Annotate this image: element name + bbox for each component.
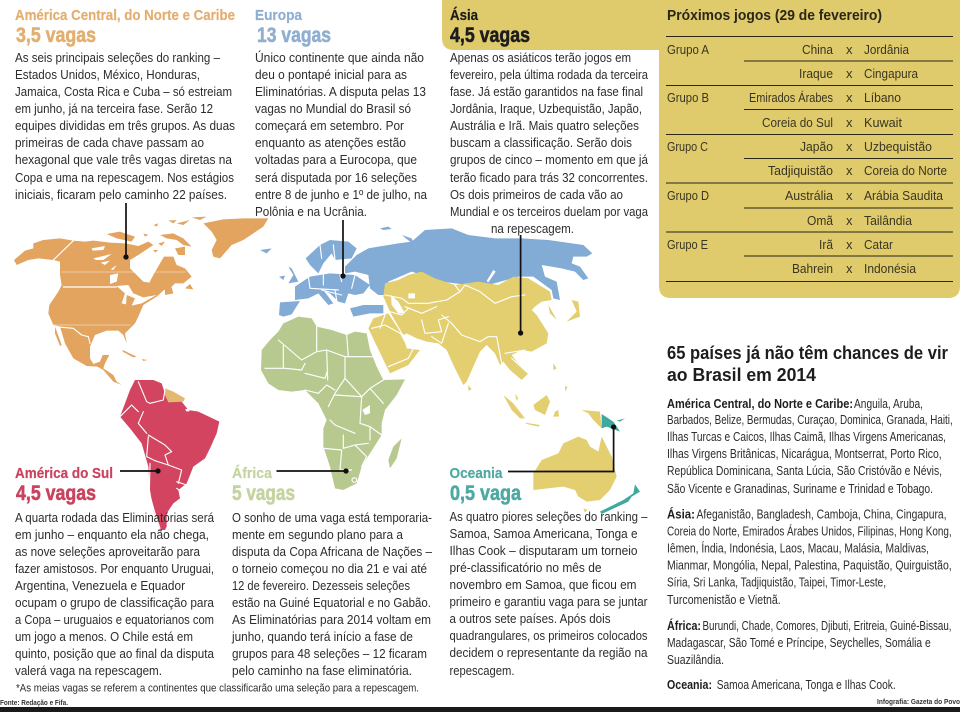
text: África: disputa da Copa Africana de Nações – [232, 544, 433, 559]
table: groups and matches: Tadjiquistão [768, 163, 833, 178]
heading: Europa [255, 7, 331, 47]
heading: próximos jogos: Próximos jogos (29 de fevereiro) [667, 8, 882, 24]
text: África: mente em segundo plano para a [232, 527, 404, 542]
list: Ásia eliminated [667, 506, 952, 607]
table: groups and matches: x [846, 139, 853, 154]
text: Oceania [450, 509, 648, 678]
list: Ásia eliminated: Síria, Sri Lanka, Tadjiquistão, Taipei, Timor-Leste, [667, 576, 886, 590]
text: África [231, 510, 433, 678]
text: América do Sul: em junho – enquanto ela não chega, [15, 527, 209, 542]
panel: Oceania [450, 465, 648, 678]
text: América do Sul: Argentina, Venezuela e Equador [15, 578, 186, 593]
text: Oceania: repescagem. [450, 663, 514, 678]
leader lines [120, 203, 615, 473]
text: Ásia: Austrália e Irã. Mais quatro seleções [450, 118, 639, 133]
bottom black bar [0, 707, 960, 712]
text: Europa: Polônia e na Ucrânia. [255, 204, 367, 219]
panel: próximos jogos table [666, 8, 953, 282]
text: Ásia: Os dois primeiros de cada vão ao [450, 187, 623, 202]
list: Ásia eliminated: Ásia: [667, 506, 695, 522]
text: Europa: entre 8 de junho e 1º de julho, na [255, 187, 428, 202]
text: América Central: Estados Unidos, México, Honduras, [15, 67, 200, 82]
text: África: As Eliminatórias para 2014 voltam em [232, 612, 431, 627]
text: América do Sul: A quarta rodada das Eliminatórias será [15, 510, 215, 525]
text: Oceania: Ilhas Cook – disputaram um torneio [450, 543, 638, 558]
table: groups and matches: x [846, 90, 853, 105]
panel: Ásia [450, 7, 649, 236]
table: groups and matches: Coreia do Norte [864, 163, 947, 178]
text: Europa: deu o pontapé inicial para as [255, 67, 407, 82]
text: África: 12 de fevereiro. Dezesseis seleções [232, 578, 410, 593]
table: groups and matches: Japão [800, 139, 833, 154]
text: América Central: primeiras de cada chave passam ao [15, 135, 204, 150]
panel: Europa [255, 7, 428, 219]
table: groups and matches: Bahrein [792, 261, 833, 276]
list: América Central eliminated [667, 397, 953, 496]
list: América Central eliminated: América Central, do Norte e Caribe: [667, 397, 853, 411]
text: Oceania: pré-classificatório no mês de [450, 560, 602, 575]
heading: Ásia [450, 7, 530, 47]
map: Africa [261, 317, 405, 490]
text: América Central: iniciais, ficaram pelo caminho 22 países. [15, 187, 227, 202]
heading: Oceania: 0,5 vaga [450, 482, 521, 505]
heading: África: África [232, 465, 273, 482]
text: Oceania: Samoa, Samoa Americana, Tonga e [450, 526, 638, 541]
text: América Central: Copa e uma na repescagem. Nos estágios [15, 170, 234, 185]
panel: yellow next games background [442, 0, 960, 298]
text: América Central: Jamaica, Costa Rica e Cuba – só estreiam [15, 84, 232, 99]
text: África: pelo caminho na fase eliminatória. [232, 663, 412, 678]
heading: América Central: 3,5 vagas [16, 24, 96, 47]
table: groups and matches: Jordânia [864, 42, 910, 57]
table: groups and matches: x [846, 42, 853, 57]
heading: 65 países [667, 343, 948, 385]
text: América do Sul [15, 510, 215, 678]
footnote: *As meias vagas se referem a continentes que classificarão uma seleção para a repescagem. [16, 682, 419, 694]
text: Ásia: Apenas os asiáticos terão jogos em [450, 50, 631, 65]
text: Oceania: a outros sete países. Após dois [450, 611, 611, 626]
heading: África: 5 vagas [232, 482, 295, 505]
list: África eliminated [667, 618, 952, 667]
text: Europa: Eliminatórias. A disputa pelas 13 [255, 84, 426, 99]
heading: Ásia: 4,5 vagas [450, 24, 530, 47]
list: Oceania eliminated: Samoa Americana, Tonga e Ilhas Cook. [717, 678, 896, 692]
panel: América Central, do Norte e Caribe [15, 7, 235, 202]
text: América do Sul: valerá vaga na repescagem. [15, 663, 162, 678]
heading: 65 países: ao Brasil em 2014 [667, 365, 816, 385]
text: América do Sul: as nove seleções aproveitarão para [15, 544, 201, 559]
map: North America [14, 217, 268, 385]
table: groups and matches: x [846, 188, 853, 203]
table: groups and matches: x [846, 213, 853, 228]
text: Europa: Único continente que ainda não [255, 50, 424, 65]
heading: África [232, 465, 295, 505]
table: groups and matches: Uzbequistão [864, 139, 932, 154]
text: Ásia: terão ficado para trás 32 concorrentes. [450, 170, 648, 185]
text: África: o torneio começou no dia 21 e vai até [232, 561, 427, 576]
text: Oceania: As quatro piores seleções do ranking – [450, 509, 648, 524]
text: América do Sul: fazer amistosos. Por enquanto Uruguai, [15, 561, 214, 576]
table: groups and matches: x [846, 115, 853, 130]
table: groups and matches: Tailândia [864, 213, 913, 228]
table: groups and matches: Grupo E [667, 237, 708, 252]
text: Ásia: buscam a classificação. Serão dois [450, 135, 632, 150]
panel: América do Sul [15, 465, 215, 678]
text: Oceania: quadrangulares, os primeiros colocados [450, 628, 648, 643]
map: Europe and Russia [260, 227, 592, 317]
table: groups and matches [667, 42, 947, 276]
text: América do Sul: ocupam o grupo de classificação para [15, 595, 215, 610]
heading: América do Sul [15, 465, 113, 505]
table: groups and matches: Emirados Árabes [749, 90, 833, 105]
text: Ásia: fase. Já estão garantidos na fase final [450, 84, 643, 99]
text: América Central: equipes divididas em três grupos. As duas [15, 118, 235, 133]
table: groups and matches: Iraque [799, 66, 833, 81]
table: groups and matches: Cingapura [864, 66, 919, 81]
table: groups and matches: Kuwait [864, 115, 902, 130]
table: groups and matches: Austrália [785, 188, 834, 203]
list: África eliminated: Suazilândia. [667, 653, 724, 667]
map: South America [120, 380, 219, 530]
table: groups and matches: Líbano [864, 90, 901, 105]
table: groups and matches: Omã [807, 213, 834, 228]
table: groups and matches: x [846, 66, 853, 81]
text: Europa: voltadas para a Eurocopa, que [255, 152, 417, 167]
text: África: estão na Guiné Equatorial e no Gabão. [232, 595, 431, 610]
table: groups and matches: Coreia do Sul [762, 115, 833, 130]
text: América do Sul: a Copa – uruguaios e equatorianos com [15, 612, 214, 627]
text: América Central: As seis principais seleções do ranking – [15, 50, 221, 65]
heading: América do Sul: 4,5 vagas [16, 482, 96, 505]
text: Ásia: fevereiro, pela última rodada da terceira [450, 67, 649, 82]
table: groups and matches: Grupo A [667, 42, 709, 57]
panel: África [231, 465, 433, 678]
heading: Oceania: Oceania [450, 465, 503, 482]
text: África: grupos para 48 seleções – 12 ficaram [232, 646, 427, 661]
heading: Europa: Europa [255, 7, 303, 24]
text: Ásia: na repescagem. [491, 221, 574, 236]
text: América do Sul: quinto, posição que ao final da disputa [15, 646, 215, 661]
table: groups and matches: Arábia Saudita [864, 188, 944, 203]
table: groups and matches: x [846, 237, 853, 252]
text: África: junho, quando terá início a fase de [231, 629, 413, 644]
text: Ásia: Mundial e os terceiros duelam por vaga [450, 204, 649, 219]
text: África: O sonho de uma vaga está temporaria- [232, 510, 432, 525]
table: groups and matches: x [846, 261, 853, 276]
list: Oceania eliminated: Oceania: [667, 678, 712, 692]
text: Oceania: primeiro e garantiu vaga para se juntar [450, 594, 648, 609]
text: Ásia [450, 50, 649, 236]
heading: Ásia: Ásia [450, 7, 479, 24]
source credit: Fonte: Redação e Fifa. [0, 700, 68, 707]
text: Europa [255, 50, 428, 219]
table: groups and matches: Grupo D [667, 188, 709, 203]
table: groups and matches: x [846, 163, 853, 178]
table: groups and matches: China [802, 42, 834, 57]
text: Oceania: decidem o representante da região na [450, 645, 648, 660]
text: Europa: enquanto as atenções estão [255, 135, 406, 150]
heading: Oceania [450, 465, 521, 505]
text: Europa: vagas no Mundial do Brasil só [255, 101, 411, 116]
text: Europa: começará em setembro. Por [255, 118, 405, 133]
list: Ásia eliminated: Turcomenistão e Vietnã. [667, 593, 781, 607]
heading: América do Sul: América do Sul [15, 465, 113, 482]
list: Oceania eliminated [667, 678, 896, 692]
table: groups and matches: Catar [864, 237, 894, 252]
map: Oceania [533, 410, 640, 514]
text: América Central: hexagonal que vale três vagas diretas na [15, 152, 233, 167]
table: groups and matches: Grupo B [667, 90, 709, 105]
text: América do Sul: um jogo a menos. O Chile está em [15, 629, 193, 644]
text: Ásia: Jordânia, Iraque, Uzbequistão, Japão, [450, 101, 642, 116]
heading: América Central [15, 7, 235, 47]
table: groups and matches: Irã [819, 237, 834, 252]
text: América Central: em junho, já na terceira fase. Serão 12 [15, 101, 213, 116]
panel: 65 países [667, 343, 953, 692]
text: Oceania: novembro em Samoa, que ficou em [450, 577, 636, 592]
heading: América Central: América Central, do Norte e Caribe [15, 7, 235, 24]
text: Europa: será disputada por 16 seleções [255, 170, 417, 185]
map: Asia [368, 272, 580, 427]
text: Ásia: grupos de cinco – momento em que já [450, 152, 649, 167]
map: Oceania highlight [600, 414, 640, 514]
table: groups and matches: Grupo C [667, 139, 708, 154]
list: América Central eliminated: Anguila, Aruba, [854, 397, 923, 411]
heading: Europa: 13 vagas [257, 24, 331, 47]
list: África eliminated: África: [667, 618, 701, 633]
world map [14, 217, 640, 530]
text: América Central [15, 50, 235, 202]
table: groups and matches: Indonésia [864, 261, 917, 276]
